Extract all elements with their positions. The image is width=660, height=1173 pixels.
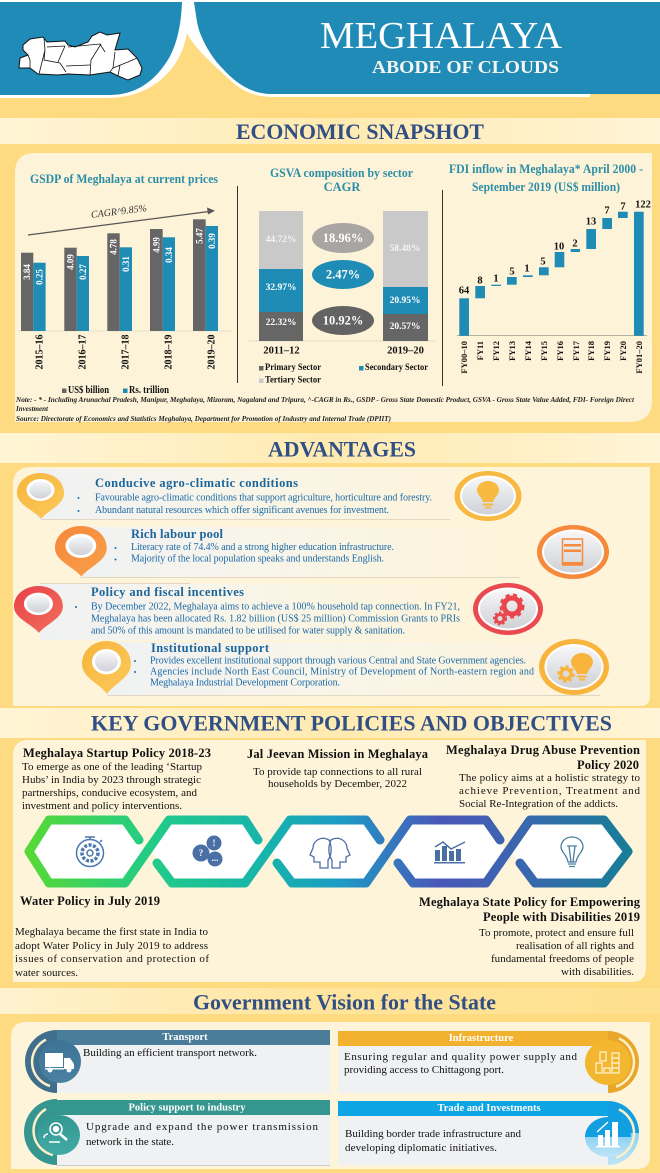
legend: sectors: Primary Sector [265,363,322,373]
chart: FDI inflow waterfall: September 2019 (US$ million) [472,180,620,194]
chart: GSVA composition: 2.47% [326,268,360,282]
hexagon chain [29,820,628,883]
policy: startup [22,746,211,812]
card: transport [25,1030,330,1093]
note and source: Investment [15,405,49,413]
chart: GSDP: 0.34 [164,247,174,263]
chart: GSVA composition: 2011–12 [263,346,300,356]
note and source: Note: - * - Including Arunachal Pradesh, Manipur, Meghalaya, Mizoram, Nagaland and Tripura, ^-CAGR in Rs., GSDP - Gross State Domestic Product, GSVA - Gross State Value Added, FDI- Foreign Direct [15,396,635,404]
note and source [15,396,635,423]
policy: Jal Jeevan Mission: Jal Jeevan Mission in Meghalaya [247,747,429,761]
chart: FDI inflow waterfall: 13 [586,216,596,228]
icon: yellow pin [82,641,131,694]
chart: GSVA composition: 58.48% [390,244,420,254]
icon: yellow pin [17,473,64,519]
chart: GSDP: 2017–18 [120,334,132,370]
chart: GSDP: 4.99 [152,237,162,253]
icon: bar and line chart [434,842,465,864]
chart: FDI inflow waterfall: 8 [477,276,483,286]
chart: FDI inflow waterfall: FY19 [602,341,612,361]
chart: GSDP: 2018–19 [164,334,174,370]
chart: FDI inflow waterfall: FY16 [555,341,565,361]
header banner [0,0,660,120]
heading band: government vision [0,988,660,1014]
card: transport: Transport [162,1032,208,1043]
policy: startup: Hubs’ in India by 2023 through strategic [22,774,201,786]
chart: FDI inflow waterfall: 2 [572,238,578,250]
chart: GSDP: GSDP of Meghalaya at current prices [30,172,218,186]
card: policy support to industry: Policy support to industry [129,1102,246,1114]
chart: GSVA composition: 20.95% [390,296,420,306]
icon: light bulb badge [454,471,522,521]
chart: FDI inflow waterfall: FY11 [475,341,485,360]
policy: Jal Jeevan Mission [247,747,429,790]
tagline: ABODE OF CLOUDS [372,57,559,77]
item: institutional support [82,639,609,696]
panel: government vision [11,1022,650,1169]
item: institutional support: Agencies include North East Council, Ministry of Development of North-eastern region and [150,666,534,678]
item: policy and fiscal incentives: and 50% of this amount is mandated to be utilised for water supply & sanitation. [91,626,405,636]
card: trade and investments: Building border trade infrastructure and [345,1128,522,1140]
chart: FDI inflow waterfall [449,162,651,374]
chart: FDI inflow waterfall: 7 [620,202,626,212]
policy: empowering people with disabilities: Meghalaya State Policy for Empowering [419,895,641,909]
policy: drug abuse prevention [446,743,640,810]
policy: startup: partnerships, conducive ecosystem, and [22,787,198,799]
card: policy support to industry: Upgrade and expand the power transmission [86,1121,318,1133]
policy: empowering people with disabilities [419,895,641,978]
policy: Jal Jeevan Mission: To provide tap connections to all rural [253,766,422,778]
policy: startup: Meghalaya Startup Policy 2018-23 [23,746,211,760]
icon: discussion bubbles: ... [212,853,218,863]
chart: FDI inflow waterfall: FY14 [523,340,533,361]
policy: drug abuse prevention: Social Re-Integration of the addicts. [459,798,618,810]
item: conducive agro-climatic conditions: Conducive agro-climatic conditions [95,476,298,490]
chart: FDI inflow waterfall: 7 [604,206,610,216]
policy: startup: investment and policy interventions. [22,800,182,812]
policy: water policy: adopt Water Policy in July 2019 to address [15,940,208,952]
panel: economic snapshot [15,153,652,423]
chart: GSVA composition: 10.92% [323,314,363,328]
policy: empowering people with disabilities: with disabilities. [561,966,634,978]
chart: FDI inflow waterfall: 1 [493,274,499,284]
item: institutional support: Institutional support [151,641,270,655]
item: rich labour pool [55,525,609,579]
chart: FDI inflow waterfall: FY18 [586,341,596,361]
card: trade and investments: developing diplomatic initiatives. [345,1142,497,1154]
item: rich labour pool: Literacy rate of 74.4% and a strong higher education infrastructure. [131,542,394,553]
policy: empowering people with disabilities: People with Disabilities 2019 [483,910,640,924]
item: conducive agro-climatic conditions [17,469,522,521]
chart: FDI inflow waterfall: FY20 [618,341,628,361]
item: policy and fiscal incentives: By December 2022, Meghalaya aims to achieve a 100% household tap connection. In FY21, [91,602,460,612]
legend: GSDP: Rs. trillion [129,385,169,396]
chart: GSDP: 3.84 [22,264,32,280]
heading band: government vision: Government Vision for the State [193,990,496,1014]
icon: discussion bubbles: ! [212,838,216,848]
chart: GSVA composition: 2019–20 [387,346,424,356]
policy: startup: To emerge as one of the leading ‘Startup [22,761,202,773]
card: infrastructure: Infrastructure [449,1033,514,1044]
chart: GSVA composition: 32.97% [266,283,296,293]
chart: GSDP [18,172,232,396]
chart: GSDP: 2015–16 [34,334,46,370]
chart: GSVA composition: 20.57% [390,322,420,332]
chart: FDI inflow waterfall: FY13 [507,341,517,361]
heading band: key government policies: KEY GOVERNMENT POLICIES AND OBJECTIVES [91,710,612,736]
legend: sectors [259,363,429,386]
item: conducive agro-climatic conditions: Abundant natural resources which offer significant avenues for investment. [95,505,389,516]
policy: water policy: issues of conservation and protection of [15,953,209,965]
icon: tablet badge [537,525,609,579]
chart: GSDP: 0.25 [34,269,44,285]
legend: sectors: Tertiary Sector [265,376,322,386]
chart: GSDP: 0.27 [78,264,88,280]
card: trade and investments: Trade and Investments [437,1103,541,1114]
icon: discussion bubbles: ? [199,848,203,858]
chart: GSVA composition: 44.72% [266,235,296,245]
chart: FDI inflow waterfall: 5 [509,266,515,278]
card: policy support to industry [24,1099,330,1166]
chart: GSDP: 2019–20 [206,334,218,370]
icon: gears badge [473,583,543,635]
icon: growth chart [596,1122,620,1148]
chart: GSDP: 5.47 [194,228,204,244]
chart: GSDP: 4.09 [66,254,76,270]
policy: empowering people with disabilities: To promote, protect and ensure full [479,927,634,939]
chart: GSVA composition: GSVA composition by sector [270,166,413,180]
chart: GSVA composition: CAGR [324,180,361,194]
policy: drug abuse prevention: The policy aims at a holistic strategy to [459,772,640,784]
heading band: key government policies [0,708,660,738]
card: policy support to industry: network in the state. [86,1136,174,1148]
policy: drug abuse prevention: achieve Prevention, Treatment and [459,785,640,797]
icon: people with magnifier [44,1123,67,1142]
card: transport: Building an efficient transport network. [83,1047,257,1059]
icon: two heads [310,838,350,868]
icon: discussion bubbles [192,836,222,866]
chart: FDI inflow waterfall: 64 [459,286,470,296]
icon: stopwatch gear [76,837,104,866]
policy: water policy: Meghalaya became the first state in India to [15,926,208,938]
policy: drug abuse prevention: Policy 2020 [577,758,639,772]
item: institutional support: Provides excellent institutional support through various Central and State Government agencies. [150,656,526,666]
icon: buildings [596,1052,619,1073]
chart: FDI inflow waterfall: FY17 [571,340,581,361]
heading band: advantages [0,433,660,463]
chart: GSDP: 2016–17 [78,334,88,370]
policy: water policy [15,894,209,979]
chart: FDI inflow waterfall: FY15 [539,341,549,361]
legend: sectors: Secondary Sector [365,363,429,373]
card: trade and investments [338,1101,639,1165]
policy: empowering people with disabilities: fundamental freedoms of people [491,953,634,965]
item: policy and fiscal incentives: Meghalaya has been allocated Rs. 1.82 billion (US$ 25 million) Commission Grants to PRIs [91,614,460,624]
item: policy and fiscal incentives [14,583,543,640]
chart: GSDP: 0.39 [207,233,217,249]
legend: GSDP [62,385,169,396]
item: rich labour pool: Majority of the local population speaks and understands English. [131,554,384,564]
arrow: CAGR [28,203,215,235]
arrow: CAGR: CAGR^9.85% [90,203,148,221]
heading band: economic snapshot [0,118,660,144]
card: infrastructure: Ensuring regular and quality power supply and [344,1051,578,1063]
policy: water policy: Water Policy in July 2019 [20,894,160,908]
chart: GSVA composition [248,166,435,386]
chart: GSDP: 0.31 [121,256,131,272]
item: policy and fiscal incentives: Policy and fiscal incentives [91,585,244,599]
chart: GSDP: 4.78 [108,239,118,255]
chart: FDI inflow waterfall: 10 [554,242,564,252]
chart: GSVA composition: 18.96% [323,231,363,245]
panel: key government policies [13,740,646,982]
chart: FDI inflow waterfall: FY12 [491,341,501,361]
map of Meghalaya [19,32,142,80]
icon: orange pin [55,526,107,577]
card: infrastructure: providing access to Chittagong port. [344,1064,504,1076]
state name: MEGHALAYA [320,15,563,57]
heading band: advantages: ADVANTAGES [268,436,416,462]
policy: drug abuse prevention: Meghalaya Drug Abuse Prevention [446,743,640,757]
legend: GSDP: US$ billion [68,385,109,396]
card: infrastructure [338,1031,639,1093]
chart: FDI inflow waterfall: FY00–10 [459,341,469,374]
item: rich labour pool: Rich labour pool [131,527,224,541]
policy: empowering people with disabilities: realisation of all rights and [516,940,634,952]
icon: red pin [14,586,63,633]
icon: bulb and gear badge [539,639,609,695]
chart: FDI inflow waterfall: 1 [524,264,530,274]
note and source: Source: Directorate of Economics and Statistics Meghalaya, Department for Promotion of Industry and Internal Trade (DPIIT) [16,415,391,423]
icon: light bulb outline [561,837,583,866]
panel: advantages [13,467,650,706]
item: conducive agro-climatic conditions: Favourable agro-climatic conditions that support agriculture, horticulture and forestry. [95,492,432,504]
chart: GSVA composition: 22.32% [266,318,296,328]
heading band: economic snapshot: ECONOMIC SNAPSHOT [236,119,484,144]
chart: FDI inflow waterfall: 5 [540,256,546,268]
chart: FDI inflow waterfall: 122 [635,200,651,210]
chart: FDI inflow waterfall: FDI inflow in Meghalaya* April 2000 - [449,162,643,176]
icon: truck [45,1053,74,1072]
chart: FDI inflow waterfall: FY01–20 [634,341,644,374]
policy: water policy: water sources. [15,967,78,979]
policy: Jal Jeevan Mission: households by December, 2022 [268,778,407,790]
item: institutional support: Meghalaya Industrial Development Corporation. [150,678,340,688]
